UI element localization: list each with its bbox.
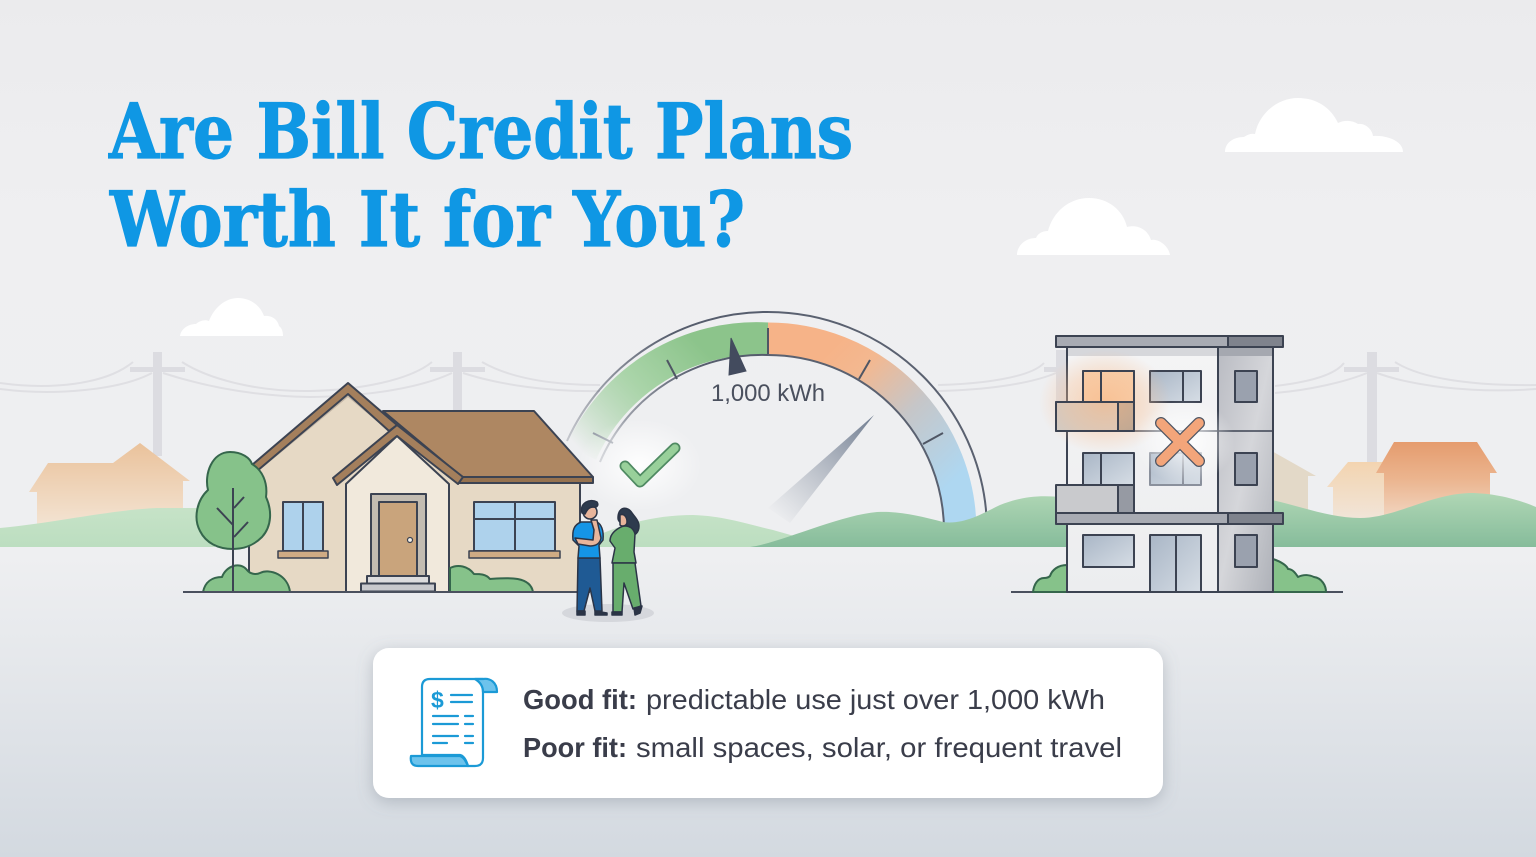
gauge green band	[581, 339, 768, 453]
apartment building	[1011, 336, 1343, 592]
left bush	[203, 565, 290, 592]
title	[108, 87, 853, 264]
gauge ticks	[667, 328, 943, 444]
floor line	[1067, 430, 1273, 432]
house right window	[474, 502, 555, 551]
gauge needle	[768, 415, 874, 523]
clouds	[180, 98, 1403, 336]
upper balcony	[1056, 402, 1118, 431]
gauge orange to blue band	[768, 339, 960, 531]
gauge outlines	[567, 312, 768, 441]
card	[373, 648, 1163, 798]
dollar sign: $	[431, 687, 444, 713]
icon: receipt	[411, 679, 497, 766]
right bush	[1273, 559, 1326, 592]
gauge	[567, 312, 987, 531]
house front section	[346, 436, 449, 592]
house left window	[283, 502, 323, 551]
divider	[1217, 347, 1219, 592]
house front gable	[333, 425, 463, 485]
house	[249, 383, 593, 592]
building ground line	[1011, 591, 1343, 593]
distant houses	[29, 442, 1497, 525]
house door	[379, 502, 417, 576]
card line 1: predictable use just over 1,000 kWh	[646, 684, 1105, 715]
card line 2: small spaces, solar, or frequent travel	[636, 732, 1122, 763]
building upper windows	[1150, 371, 1201, 402]
building front wall	[1067, 347, 1218, 592]
tree and bushes at house	[183, 452, 590, 592]
building side wall	[1218, 347, 1273, 592]
left bush	[1033, 565, 1067, 592]
glow behind check	[578, 419, 702, 511]
gauge label: 1,000 kWh	[711, 380, 825, 407]
icon: check mark	[625, 448, 675, 482]
house ground line	[183, 591, 590, 593]
gauge marker	[729, 338, 746, 375]
hills	[0, 493, 1536, 547]
orange glow	[1039, 350, 1171, 454]
house roof	[383, 411, 593, 477]
woman	[610, 508, 642, 615]
card line 1: Good fit:	[523, 684, 637, 715]
house steps	[367, 576, 429, 584]
building ground floor	[1083, 535, 1134, 567]
glow behind x	[1135, 400, 1235, 484]
house main wall	[249, 390, 580, 592]
people	[562, 501, 654, 622]
tree	[197, 452, 270, 549]
man	[573, 501, 607, 615]
house door frame	[371, 494, 426, 576]
building floor band	[1056, 513, 1228, 524]
house main gable	[252, 383, 397, 471]
lower balcony	[1056, 485, 1118, 513]
title: Are Bill Credit Plans	[108, 87, 853, 176]
building middle windows	[1083, 453, 1134, 485]
people shadow	[562, 604, 654, 622]
icon: x mark	[1161, 423, 1199, 461]
right bush	[450, 566, 533, 592]
power lines and poles	[0, 350, 1536, 464]
building roof	[1056, 336, 1228, 347]
card line 2: Poor fit:	[523, 732, 627, 763]
title: Worth It for You?	[109, 175, 745, 264]
